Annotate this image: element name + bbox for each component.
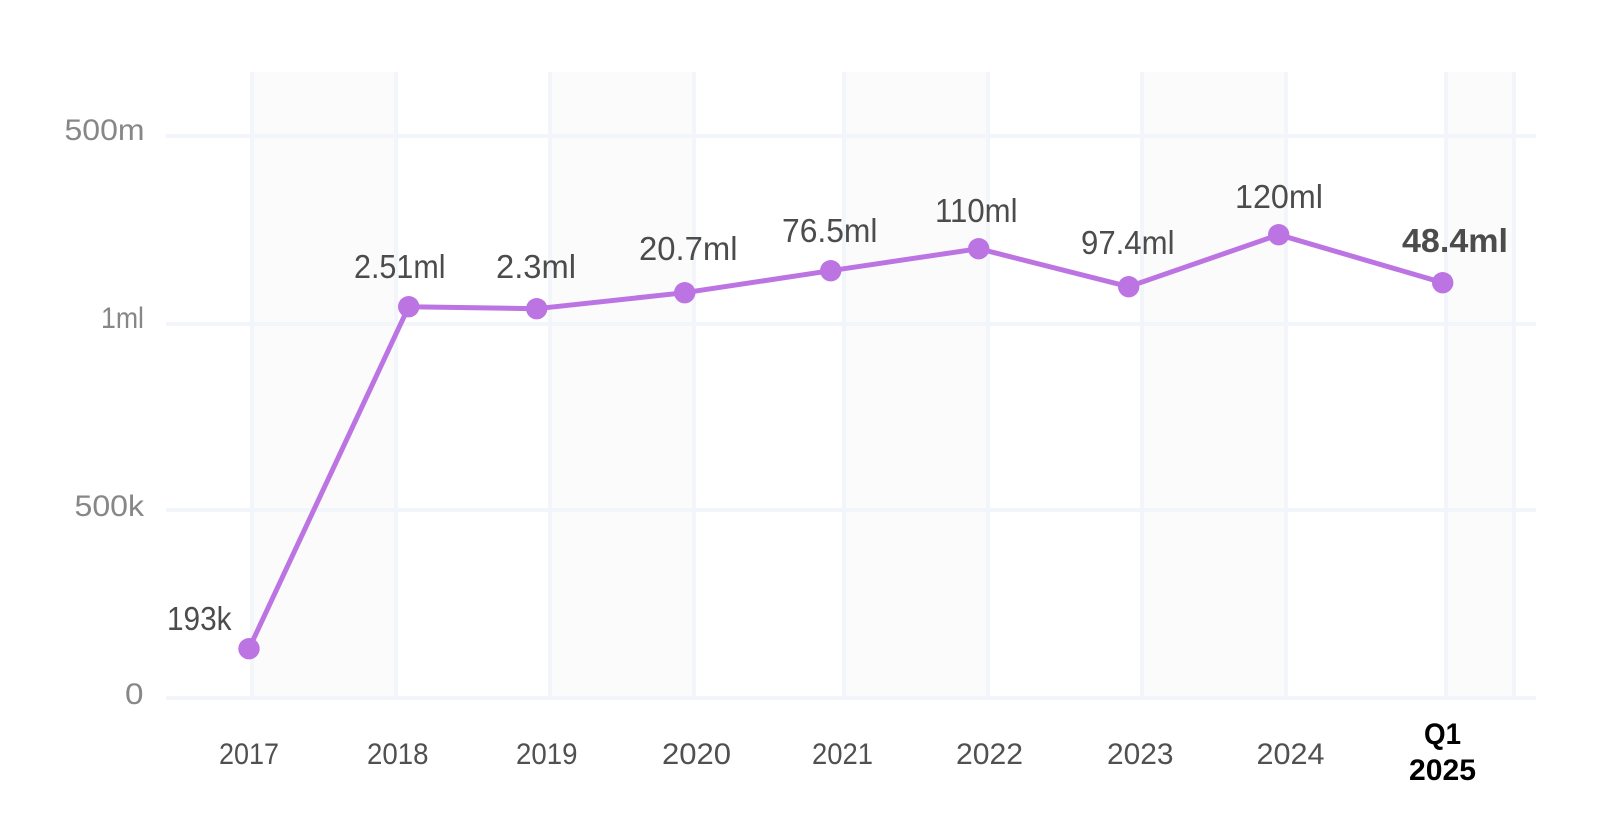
y-axis labels: 0: [125, 678, 144, 711]
data labels: 2.3ml: [496, 248, 576, 285]
y-axis labels: [64, 114, 144, 711]
alternating column bands: [254, 72, 1512, 696]
data labels: 110ml: [935, 192, 1018, 229]
y-axis labels: 1ml: [101, 302, 144, 335]
x-axis labels: 2020: [662, 738, 731, 771]
x-axis labels: 2023: [1107, 738, 1174, 771]
x-axis labels: 2019: [516, 738, 578, 771]
x-axis labels: [219, 718, 1476, 787]
data line: [249, 235, 1443, 649]
x-axis labels: 2021: [812, 738, 873, 771]
x-axis labels: 2022: [956, 738, 1023, 771]
data labels: 97.4ml: [1081, 224, 1174, 261]
y-axis labels: 500k: [74, 490, 144, 523]
x-axis labels: Q1: [1424, 718, 1461, 751]
x-axis labels: 2017: [219, 738, 279, 771]
data labels: 48.4ml: [1402, 222, 1508, 259]
data labels: 20.7ml: [639, 230, 738, 267]
x-axis labels: 2018: [367, 738, 428, 771]
data labels: [167, 178, 1508, 637]
x-axis labels: 2025: [1409, 754, 1476, 787]
y-axis labels: 500m: [64, 114, 144, 147]
data labels: 76.5ml: [782, 212, 878, 249]
x-axis labels: 2024: [1256, 738, 1324, 771]
data labels: 193k: [167, 600, 232, 637]
data labels: 120ml: [1235, 178, 1323, 215]
data labels: 2.51ml: [354, 248, 446, 285]
data points: [238, 224, 1453, 659]
